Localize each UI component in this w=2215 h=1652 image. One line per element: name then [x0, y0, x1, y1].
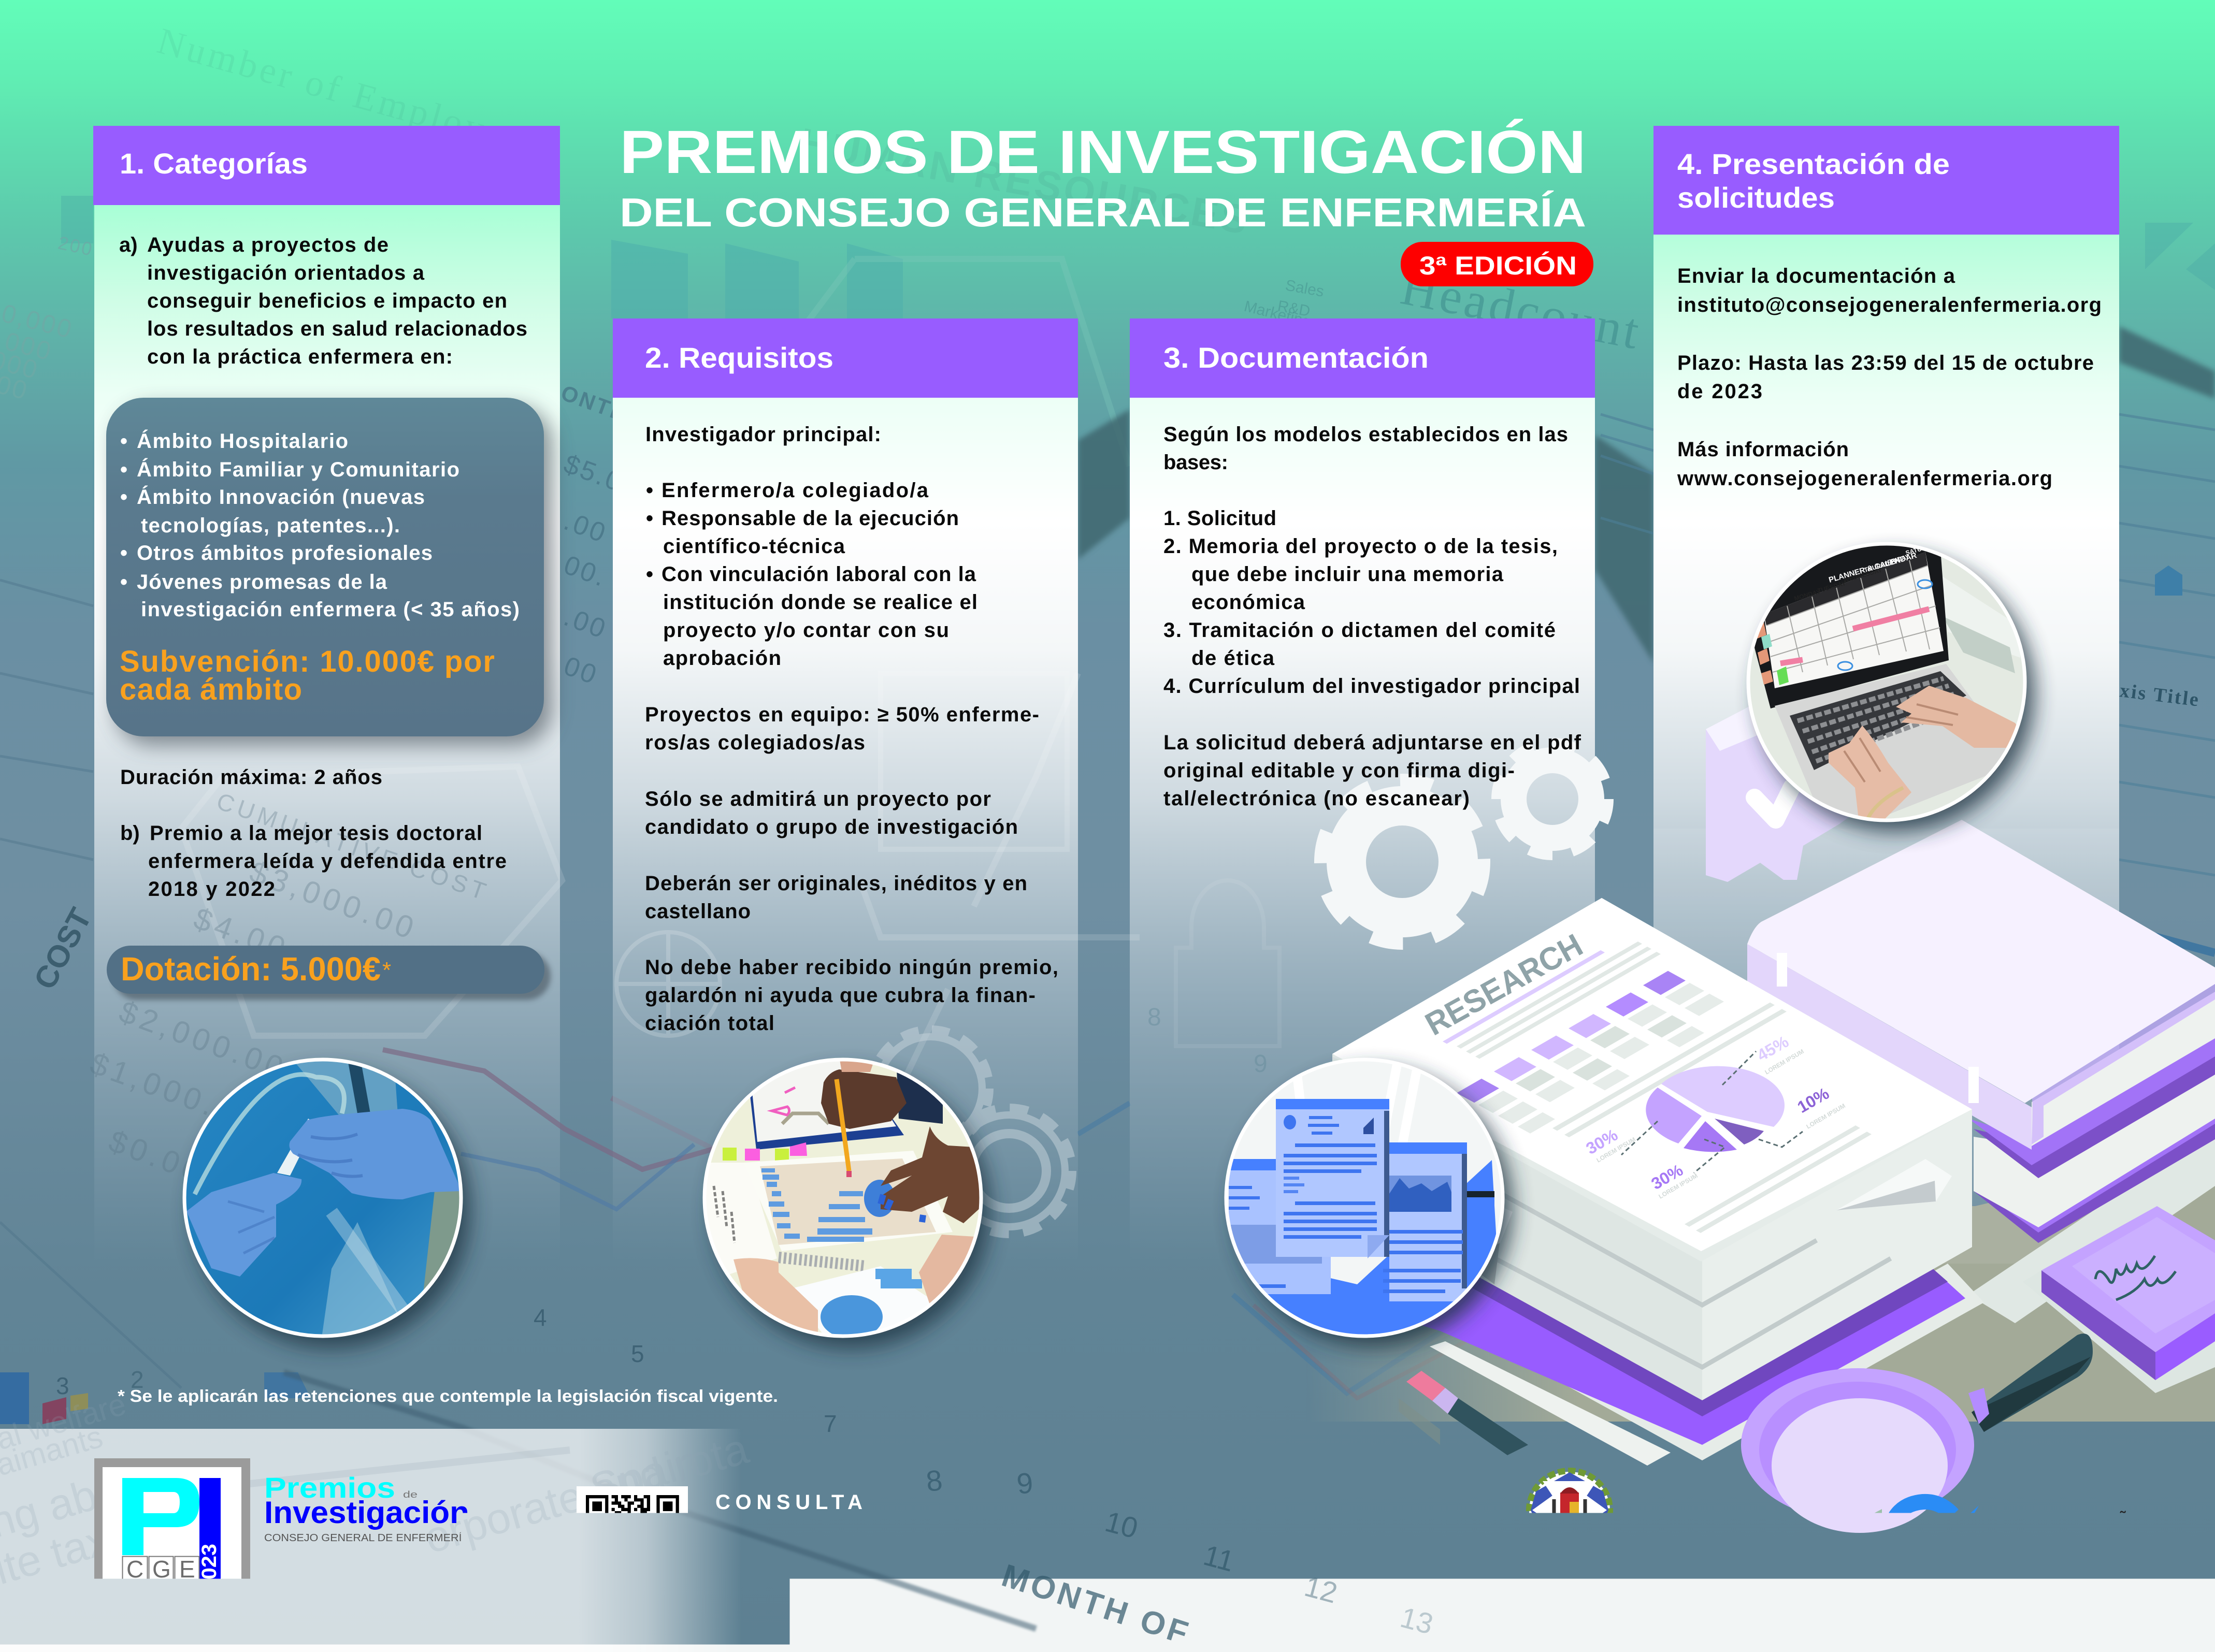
text block: requisitos [645, 423, 1058, 1035]
text: Consejo General de Colegios Oficiales [1385, 1569, 1754, 1617]
pen [1968, 1334, 2093, 1432]
logo text: ENFERMERA [1989, 1548, 2089, 1566]
panel body [94, 205, 560, 1264]
logo: Instituto Español de Investigación Enfermera [1838, 1502, 2150, 1571]
text block: requisitos: Proyectos en equipo: ≥ 50% enferme- [645, 703, 1039, 726]
pie labels [1583, 1032, 1847, 1200]
subvención amount [120, 645, 495, 706]
background gears near photo [871, 1030, 1072, 1234]
background: faint chart decoration: 2 [131, 1366, 144, 1393]
pie chart [1621, 1051, 1803, 1173]
logo: Premios de Investigación: Premios [264, 1471, 395, 1504]
list of ámbitos: • [120, 571, 127, 593]
text block: category b: enfermera leída y defendida entre [148, 850, 507, 873]
text block: documentación [1163, 423, 1581, 810]
text block: requisitos: ros/as colegiados/as [645, 731, 865, 754]
logo: Premios de Investigación: CONSEJO GENERAL DE ENFERMERÍA [264, 1532, 470, 1544]
photo: blue web documents [1222, 1056, 1513, 1346]
panel: 1. Categorías [93, 126, 560, 1264]
logo: Premios de Investigación: de [403, 1489, 418, 1500]
text block: documentación: 3. Tramitación o dictamen del comité [1163, 619, 1556, 642]
text block: presentación de solicitudes: www.consejogeneralenfermeria.org [1677, 467, 2052, 490]
letter P [122, 1478, 199, 1555]
text block: presentación de solicitudes: instituto@consejogeneralenfermeria.org [1677, 294, 2102, 316]
heading on sheet: RESEARCH [1419, 927, 1589, 1042]
text block: category a: Ayudas a proyectos de [147, 234, 389, 256]
text block: requisitos: • [646, 479, 653, 502]
background: faint chart decoration: Sales [1284, 277, 1325, 300]
QR code [577, 1486, 688, 1597]
heading: 4. Presentación de [1677, 148, 1950, 180]
footer band: top lip over illustration [1606, 1422, 2215, 1429]
text: consulta las bases: LAS BASES [715, 1517, 866, 1540]
sheet fold [1836, 1159, 1952, 1210]
text block: documentación: bases: [1163, 451, 1228, 474]
text block: requisitos: Investigador principal: [645, 423, 881, 446]
translucent panel column over illustration [1653, 829, 2119, 1264]
text block: requisitos: Con vinculación laboral con la [661, 563, 976, 586]
text block: requisitos: candidato o grupo de investigación [645, 816, 1018, 838]
panel header [1130, 318, 1595, 398]
box [106, 398, 544, 736]
footer background marks: 13 [1397, 1601, 1436, 1641]
footer background marks: 9 [1015, 1466, 1034, 1500]
background: faint chart decoration: COST [27, 902, 98, 995]
faint background marks showing through panels: $4.00 [190, 901, 294, 967]
edition badge: 3ª EDICIÓN [1419, 251, 1577, 280]
pie labels: 45% [1754, 1032, 1792, 1065]
right window [1383, 1142, 1467, 1301]
list of ámbitos: Jóvenes promesas de la [137, 571, 387, 593]
main title: PREMIOS DE INVESTIGACIÓN [620, 118, 1586, 186]
subvención amount: Subvención: 10.000€ por [120, 645, 495, 678]
panel body [1653, 235, 2119, 1264]
text block: documentación: económica [1191, 591, 1305, 614]
subtitle: DEL CONSEJO GENERAL DE ENFERMERÍA [620, 190, 1586, 235]
footer right opaque zone [1528, 1429, 2215, 1652]
footnote: * Se le aplicarán las retenciones que contemple la legislación fiscal vigente. [118, 1386, 778, 1405]
panel body [613, 398, 1078, 1264]
text block: presentación de solicitudes: Plazo: Hasta las 23:59 del 15 de octubre [1677, 352, 2094, 374]
text block: category b: 2018 y 2022 [148, 878, 275, 901]
pie labels: LOREM IPSUM [1595, 1136, 1637, 1164]
list of ámbitos [120, 429, 520, 621]
logo: PI CGE 2023: 2023 [198, 1544, 221, 1591]
callout: dotación: * [382, 958, 391, 983]
pie labels: LOREM IPSUM [1805, 1102, 1847, 1131]
faint background marks showing through panels: $3,000.00 [246, 854, 422, 947]
sheet layout in isometric plane [1399, 929, 1939, 1233]
logo: Premios de Investigación: Investigación [264, 1495, 469, 1530]
footer background marks: 12 [1301, 1570, 1341, 1610]
logo mark [1838, 1502, 1979, 1571]
pie labels: LOREM IPSUM [1763, 1048, 1805, 1076]
text block: requisitos: Sólo se admitirá un proyecto por [645, 788, 991, 810]
text block: category a: con la práctica enfermera en: [147, 345, 453, 368]
background: faint chart decoration: 4 [534, 1304, 547, 1331]
text block: category b [120, 822, 507, 901]
text block: category b: Premio a la mejor tesis doctoral [150, 822, 482, 845]
background: faint chart decoration: Marketing [1242, 298, 1313, 331]
pie labels: LOREM IPSUM [1658, 1172, 1699, 1200]
main window [1276, 1099, 1389, 1258]
laptop screen [1748, 541, 1949, 708]
illustration: research documents, book, notepad and magnifier [1305, 704, 2215, 1533]
faint background marks showing through panels: $1,000.00 [86, 1046, 263, 1138]
list of ámbitos: • [120, 430, 127, 453]
footer band: right light zone [1285, 1429, 2215, 1652]
pie labels: 30% [1583, 1125, 1621, 1158]
text block: requisitos: castellano [645, 900, 751, 923]
text block: requisitos: ciación total [645, 1012, 774, 1035]
chat bubble with check [1706, 704, 1927, 882]
text: consulta las bases: EN EL QR [715, 1569, 842, 1591]
heading: 3. Documentación [1163, 341, 1429, 374]
laptop screen: TUESDAY [1817, 579, 1847, 595]
faint background marks showing through panels: CUMULATIVE COST [213, 787, 493, 906]
left window [1229, 1159, 1331, 1294]
list of ámbitos: • [120, 542, 127, 564]
heading: solicitudes [1677, 181, 1835, 214]
panel header [613, 318, 1078, 398]
logo text [1989, 1511, 2150, 1566]
text block: category a: conseguir beneficios e impacto en [147, 289, 507, 312]
logo: Premios de Investigación [264, 1471, 470, 1544]
background: faint chart decoration: 00. [560, 550, 611, 593]
callout: dotación: Dotación: 5.000€ [121, 950, 381, 988]
text block: documentación: original editable y con firma digi- [1163, 759, 1515, 782]
text block: requisitos: No debe haber recibido ningún premio, [645, 956, 1058, 979]
CGE boxes [122, 1556, 199, 1583]
faint background marks showing through panels: 8 [1147, 1004, 1161, 1031]
text block: documentación: 4. Currículum del investigador principal [1163, 675, 1580, 698]
laptop screen: WEDNESDAY [1843, 566, 1883, 584]
text block: documentación: 2. Memoria del proyecto o de la tesis, [1163, 535, 1558, 558]
edition badge [1401, 242, 1593, 286]
panel body [1130, 398, 1595, 1264]
text: Consejo General de Colegios Oficiales: de Enfermería de España [1448, 1593, 1690, 1617]
text block: category a: a) [119, 234, 138, 256]
pie labels: 30% [1648, 1161, 1686, 1193]
background: faint chart decoration: 200 [56, 232, 95, 260]
title block [620, 118, 1593, 286]
box shadow [115, 407, 553, 745]
laptop screen: SATURDAY [1905, 541, 1939, 557]
magnifier [1741, 1368, 1974, 1533]
panel: 4. Presentación de solicitudes [1653, 126, 2119, 1264]
callout: ámbitos and subvención [106, 398, 553, 745]
heading: 1. Categorías [120, 147, 308, 180]
photo: hands over tablet with charts [699, 1054, 990, 1348]
pie labels: 10% [1794, 1084, 1832, 1117]
footer background marks: Spain [585, 1436, 705, 1513]
background: faint chart decoration: .00 [560, 506, 611, 549]
photo: gloved hands with tube [181, 1056, 470, 1348]
list of ámbitos: investigación enfermera (< 35 años) [141, 598, 520, 621]
photo: laptop with calendar [1746, 539, 2035, 834]
footer background marks: 10 [1102, 1505, 1141, 1545]
laptop base [1775, 664, 2019, 829]
faint background marks showing through panels: $0.00 [105, 1123, 209, 1190]
text: Consejo General de Colegios Oficiales: Consejo General de Colegios Oficiales [1385, 1569, 1754, 1592]
text block: category b: b) [120, 822, 140, 845]
text block: requisitos: proyecto y/o contar con su [663, 619, 949, 642]
background: faint chart decoration: R&D [1276, 297, 1312, 320]
list of ámbitos: Ámbito Hospitalario [137, 429, 348, 453]
list of ámbitos: tecnologías, patentes...). [141, 514, 400, 537]
background: faint chart decoration: HUMAN RESOURCES [796, 119, 1254, 243]
footer background marks: MONTH OF [998, 1558, 1195, 1652]
text block: requisitos: Responsable de la ejecución [661, 507, 959, 530]
text block: requisitos: aprobación [663, 647, 781, 670]
footer background marks [0, 1386, 1436, 1652]
background: faint chart decoration: 00 [560, 651, 602, 691]
text block: duration: Duración máxima: 2 años [120, 766, 382, 789]
book [1747, 820, 2215, 1323]
panel header [1653, 126, 2119, 235]
list of ámbitos: • [120, 486, 127, 509]
background: faint chart decoration: Headcount [1397, 259, 1646, 360]
list of ámbitos: Ámbito Familiar y Comunitario [137, 458, 459, 481]
text block: requisitos: • [646, 507, 653, 530]
logo: PI CGE 2023 [94, 1458, 250, 1614]
hands [1829, 686, 2033, 834]
gears [1322, 744, 1608, 942]
text block: documentación: de ética [1191, 647, 1275, 670]
letter I with year [199, 1478, 221, 1595]
background: faint chart decoration: 3 [56, 1372, 69, 1399]
logo: Consejo General emblem [1529, 1471, 1610, 1549]
footer band: left light zone [0, 1429, 742, 1652]
background: faint chart decoration: Number of Employees [153, 20, 546, 166]
laptop screen: PLANNER & CALENDAR [1828, 551, 1918, 585]
text block: documentación: tal/electrónica (no escanear) [1163, 787, 1470, 810]
logo text: INSTITUTO ESPAÑOL [1989, 1511, 2150, 1529]
stack of paper [1332, 898, 1972, 1400]
laptop screen: MONDAY [1793, 588, 1821, 602]
list of ámbitos: • [120, 458, 127, 481]
text block: requisitos: científico-técnica [663, 535, 845, 558]
text block: presentación de solicitudes [1677, 265, 2102, 490]
faint background marks showing through panels [86, 673, 1279, 1234]
text block: documentación: La solicitud deberá adjuntarse en el pdf [1163, 731, 1581, 754]
text block: documentación: que debe incluir una memoria [1191, 563, 1504, 586]
laptop screen: THURSDAY [1863, 557, 1898, 574]
footer background marks: 8 [925, 1463, 944, 1498]
footer background marks: 11 [1200, 1539, 1238, 1578]
text block: presentación de solicitudes: de 2023 [1677, 380, 1762, 403]
ground surface [1305, 1150, 2215, 1422]
laptop screen: FRIDAY [1887, 553, 1910, 566]
notepad with signature [2023, 1206, 2215, 1393]
text block: category a: los resultados en salud relacionados [147, 317, 527, 340]
text block: requisitos: galardón ni ayuda que cubra la finan- [645, 984, 1035, 1007]
text block: documentación: 1. Solicitud [1163, 507, 1276, 530]
CGE boxes: C [126, 1556, 143, 1583]
panel: 2. Requisitos [613, 318, 1078, 1264]
panel: 3. Documentación [1130, 318, 1595, 1264]
text block: category a: investigación orientados a [147, 262, 425, 284]
footer background marks: orporate and rota [419, 1424, 754, 1562]
text block: documentación: Según los modelos establecidos en las [1163, 423, 1568, 446]
list of ámbitos: Otros ámbitos profesionales [137, 542, 433, 564]
background: faint chart decoration: 7 [824, 1410, 837, 1437]
list of ámbitos: Ámbito Innovación (nuevas [137, 485, 425, 509]
top sheet [1332, 898, 1972, 1262]
panel header [93, 126, 560, 205]
faint background marks showing through panels: 9 [1254, 1050, 1268, 1078]
text block: requisitos: Enfermero/a colegiado/a [661, 479, 929, 502]
text block: requisitos: Deberán ser originales, inéditos y en [645, 872, 1027, 895]
text block: category a [119, 234, 527, 368]
background: faint chart decoration: 0,000 [0, 298, 76, 344]
background: faint chart decoration: ONTH [558, 380, 632, 427]
text block: presentación de solicitudes: Enviar la documentación a [1677, 265, 1955, 287]
text: consulta las bases: ÍNTEGRAS [715, 1542, 852, 1566]
heading [1677, 148, 1950, 214]
text block: presentación de solicitudes: Más información [1677, 438, 1849, 461]
text: consulta las bases: CONSULTA [715, 1491, 862, 1514]
background: faint chart decoration: $5.0 [560, 449, 627, 498]
CGE boxes: E [179, 1556, 195, 1583]
CGE boxes: G [152, 1556, 171, 1583]
subvención amount: cada ámbito [120, 673, 302, 706]
text: consulta las bases [715, 1491, 866, 1591]
purple base under the papers [1357, 1243, 1984, 1466]
logo text: DE INVESTIGACIÓN [1989, 1529, 2139, 1547]
pencil [1399, 1371, 1528, 1455]
background: faint chart decoration: .00 [560, 602, 611, 645]
background: faint chart decoration: xis Title [2119, 679, 2201, 711]
QR centre mark [619, 1528, 646, 1555]
callout: dotación [107, 946, 551, 1000]
text block: requisitos: institución donde se realice el [663, 591, 977, 614]
text block: requisitos: • [646, 563, 653, 586]
faint background marks showing through panels: $2,000.00 [115, 994, 292, 1086]
background: faint chart decoration: 5 [631, 1340, 644, 1367]
heading: 2. Requisitos [645, 341, 833, 374]
